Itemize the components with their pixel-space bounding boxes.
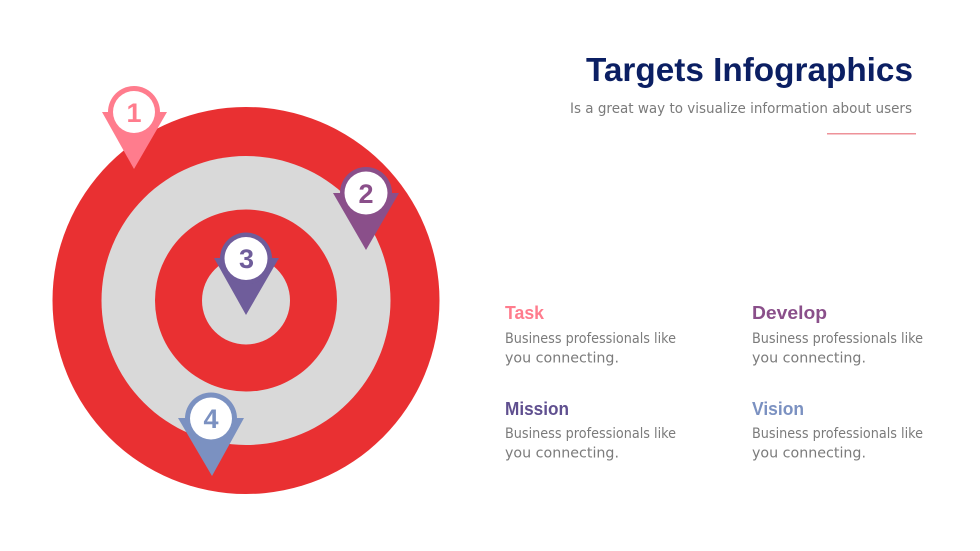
text block: Task: Task	[505, 303, 545, 323]
accent line	[827, 133, 916, 134]
pin 3: 3	[239, 244, 254, 274]
text block: Task: Business professionals like	[505, 331, 676, 347]
text block: Mission	[505, 399, 676, 462]
text block: Task	[505, 303, 676, 366]
pin 4: 4	[203, 404, 219, 434]
pin 1	[102, 86, 167, 169]
title: Targets Infographics	[586, 51, 913, 88]
text block: Vision: Business professionals like	[752, 426, 923, 442]
text block: Mission: Mission	[505, 399, 569, 419]
text block: Vision: Vision	[752, 399, 804, 419]
pin 2: 2	[358, 179, 374, 209]
text block: Mission: you connecting.	[505, 446, 619, 462]
pin 4	[178, 392, 244, 476]
text block: Develop: you connecting.	[752, 350, 866, 366]
text block: Vision	[752, 399, 923, 462]
pin 2	[333, 167, 399, 250]
text block: Vision: you connecting.	[752, 446, 866, 462]
pin 3	[214, 232, 279, 315]
subtitle: Is a great way to visualize information about users	[570, 101, 912, 117]
text block: Develop	[752, 303, 923, 366]
text block: Task: you connecting.	[505, 350, 619, 366]
text block: Develop: Develop	[752, 303, 827, 323]
text block: Develop: Business professionals like	[752, 331, 923, 347]
target: concentric rings	[52, 107, 440, 494]
text block: Mission: Business professionals like	[505, 426, 676, 442]
pin 1: 1	[126, 98, 142, 128]
